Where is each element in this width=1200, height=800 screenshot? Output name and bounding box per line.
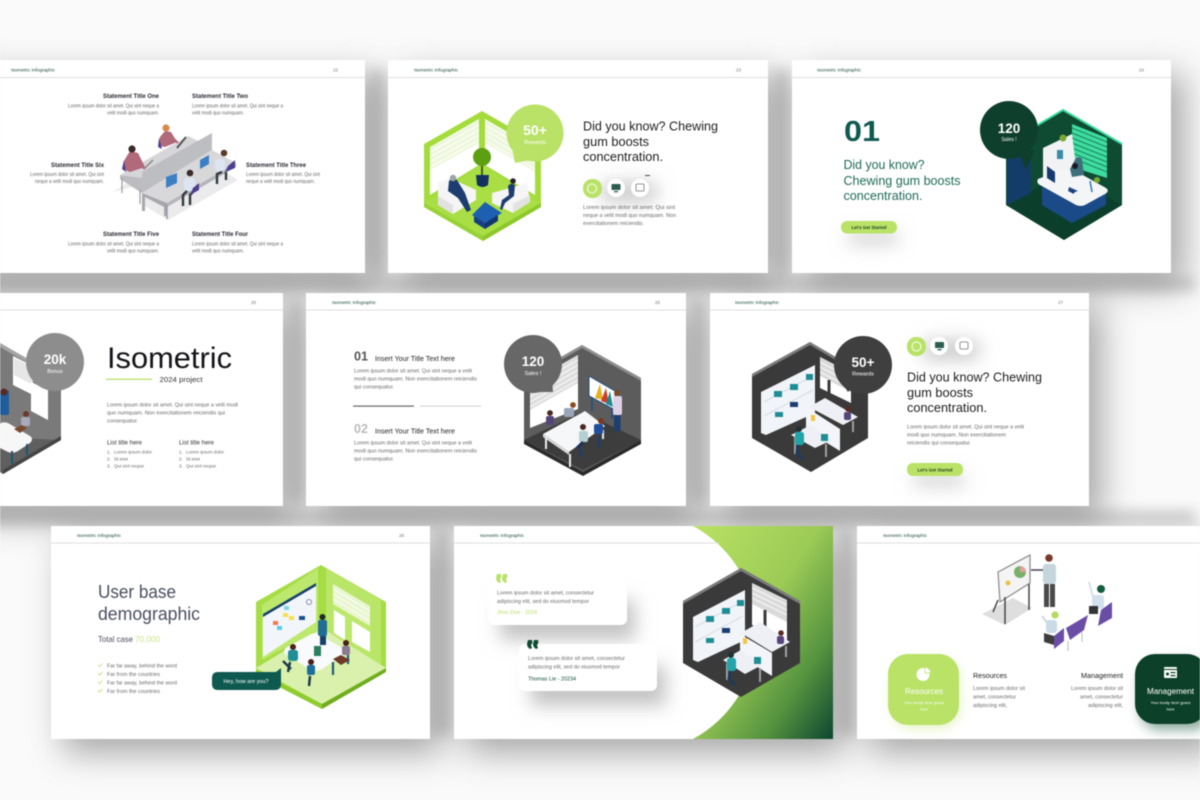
list: first column: 1. [107,450,111,454]
bubble: 50+ rewards dark [834,336,892,394]
text: body copy: neque a velit modi quo numquam. Non [583,213,676,219]
item: 01 title: modi quo numquam. Non exercitationem reiciendis [354,376,478,382]
person: top left worker [122,145,145,172]
panel: user base demographic slide 28 [51,526,430,739]
panel: 01 did you know slide 24: Isometric Infographic [817,68,862,74]
card: testimonial one [488,574,635,640]
text: body copy: quo numquam. Non exercitationem reiciendis qui [107,410,225,416]
illustration: gray presentation room [524,345,641,476]
person: presenter [1031,554,1056,607]
button: let's get started: Let's Get Started [852,225,887,230]
panel: resources and management slide: Isometric Infographic [883,533,928,539]
item: 01 title: Insert Your Title Text here [375,356,455,363]
card: testimonial one: adipiscing elit, sed do eiusmod tempor [497,599,589,605]
text: statement six: Lorem ipsum dolor sit amet. Qui sint [30,172,105,178]
text: resources description: amet, consectetur [973,694,1016,700]
item: 02 title: 02 [354,421,368,436]
person: front worker back [183,170,199,206]
list: first column [107,440,153,468]
illustration: green meeting room [256,565,386,709]
heading: did you know green: Did you know? [844,157,924,172]
text: statement four: Lorem ipsum dolor sit amet. Qui sint neque a [192,242,283,248]
text: statement five: Statement Title Five [103,231,159,238]
list: first column: Lorem ipsum dolor [114,450,153,454]
list: second column: 1. [179,450,183,454]
bubble: 50+ rewards: 50+ [523,122,547,138]
bubble: 20k bonus: 20k [44,352,67,367]
illustration: dark shelf room [752,342,868,472]
panel: did you know dark slide 27: 27 [1058,300,1064,305]
text: management description: Lorem ipsum dolor sit [1071,686,1124,692]
text: resources description [973,673,1026,709]
text: body copy: Lorem ipsum dolor sit amet. Qui sint [583,205,676,211]
icon: dark quote mark [527,640,538,649]
card: management: You body text goes [1150,700,1190,705]
text: statement two: Lorem ipsum dolor sit amet. Qui sint neque a [192,104,283,110]
text: statement two: velit modi quo numquam. [192,110,244,116]
icon: blue monitors [166,155,209,188]
text: statement three: neque a velit modi quo numquam. [246,179,315,185]
stat: total case 70,000 [98,634,160,644]
person: student hand raised [1089,582,1112,626]
heading: user base demographic [98,581,200,624]
text: statement four [192,231,283,254]
card: testimonial two: adipiscing elit, sed do eiusmod tempor [528,664,620,670]
card: testimonial one: Lorem ipsum dolor sit amet, consectetur [497,590,594,596]
list: first column: Sit amet [114,456,129,462]
chart: presentation board [589,376,615,419]
button: let's get started: Let's Get Started [918,468,953,472]
text: body copy [907,424,1025,446]
illustration: dark shelf room on gradient [683,568,800,697]
icon row: home, monitor, folder [583,179,658,201]
text: statement three: Lorem ipsum dolor sit amet. Qui sint [246,172,321,178]
card: testimonial two: Lorem ipsum dolor sit amet, consectetur [528,656,625,662]
card: resources: You body text goes [904,700,944,705]
chart: planning wall board [263,583,316,657]
illustration: presenter with board and students [982,554,1112,651]
stat: total case 70,000: Total case [98,634,133,644]
panel: two titles slide 26: Isometric Infographic [332,300,377,306]
list: second column: 3. [179,464,183,468]
list: checklist: Far far away, behind the word [107,680,177,686]
text: statement three [246,162,321,185]
heading: did you know [907,370,1042,415]
icon: right sofa with woman [492,178,530,213]
heading: user base demographic: User base [98,581,176,602]
text: statement five: Lorem ipsum dolor sit amet. Qui sint neque a [68,242,159,248]
card: testimonial two [519,640,666,706]
heading: did you know [583,118,718,164]
panel: user base demographic slide 28: Isometric Infographic [77,533,122,539]
icon: id card [1164,667,1177,678]
item: 02 title: modi quo numquam. Non exercitationem reiciendis [354,448,478,454]
heading: user base demographic: demographic [98,603,200,624]
text: statement five: velit modi quo numquam. [107,248,159,254]
text: statement three: Statement Title Three [246,162,306,169]
text: body copy: exercitationem reiciendis. [583,221,644,227]
text: statement one [68,93,159,116]
text: body copy: Lorem ipsum dolor sit amet. Qui sint neque a velit [907,424,1025,430]
text: statement five [68,231,159,254]
heading: isometric: Isometric [107,342,232,375]
heading: did you know: Did you know? Chewing [907,370,1042,384]
callout: hey how are you: Hey, how are you? [224,679,268,685]
text: statement one: velit modi quo numquam. [107,110,159,116]
subheading: 2024 project: 2024 project [160,375,203,384]
icon: standing presenter [613,390,622,431]
panel: did you know dark slide 27: Isometric Infographic [735,300,780,306]
heading: did you know: gum boosts [907,385,973,400]
text: statement six: neque a velit modi quo numquam. [35,179,104,185]
icon: pie chart [916,667,931,681]
button: let's get started [907,463,965,485]
list: second column [179,440,225,468]
card: management [1135,654,1200,730]
item: 01 title [354,348,478,390]
text: body copy: consequatur. [107,418,138,424]
background: green gradient curve [693,526,833,739]
text: management description: Management [1081,673,1123,680]
bubble: 120 sales gray [504,335,562,393]
illustration: gray meeting room cropped [0,343,61,474]
list: second column: Lorem ipsum dolor [186,450,225,454]
icon row: home, monitor, folder [907,337,980,359]
bubble: 20k bonus: Bonus [47,369,63,375]
text: statement six: Statement Title Six [51,162,104,169]
panel: testimonials slide [454,526,833,739]
heading: did you know: gum boosts [583,134,649,149]
bubble: 50+ rewards: Rewards [524,140,546,146]
list: second column: 2. [179,456,183,462]
list: first column: Qui sint neque [114,464,145,468]
callout: hey how are you [212,668,281,690]
panel: isometric 2024 project slide 25: 25 [251,300,257,305]
text: management description: adipiscing elit, [1088,703,1123,709]
icon: potted plant [473,148,491,187]
text: statement one: Statement Title One [103,93,159,100]
text: statement four: Statement Title Four [192,231,248,238]
text: statement four: velit modi quo numquam. [192,248,244,254]
bubble: 120 sales gray: 120 [522,354,544,369]
panel: did you know slide 23: Isometric Infographic [414,68,459,74]
list: first column: List title here [107,440,142,446]
icon: meeting people [283,614,350,686]
panel: testimonials slide: Isometric Infographic [480,533,525,539]
panel: two titles slide 26 [306,293,686,506]
card: resources [888,654,960,728]
card: testimonial two: Thomas Lie - 20234 [528,676,576,682]
text: resources description: Lorem ipsum dolor sit [973,686,1026,692]
heading: did you know green: Chewing gum boosts [844,173,961,188]
heading: did you know: concentration. [583,149,663,164]
text: management description [1071,673,1124,709]
bubble: 120 sales: 120 [998,121,1020,136]
person: student seated left [1042,611,1064,649]
panel: resources and management slide [857,526,1200,739]
text: management description: amet, consectetur [1080,694,1123,700]
list: checklist: Far from the countries [107,672,161,678]
text: resources description: adipiscing elit, [973,703,1007,709]
number: 01: 01 [844,116,880,148]
text: body copy: modi quo numquam. Non exercitationem [907,432,1006,438]
item: 02 title: Insert Your Title Text here [375,428,455,436]
panel: did you know slide 23: 23 [736,68,742,72]
text: body copy: Lorem ipsum dolor sit amet. Qui sint neque a velit modi [107,402,238,408]
heading: did you know green [844,157,961,203]
card: resources: here [920,706,929,712]
card: resources: Resources [905,687,943,696]
person: top right worker [158,124,178,149]
item: 02 title: qui consequatur. [354,456,394,462]
list: checklist: Far from the countries [107,689,161,695]
text: statement one: Lorem ipsum dolor sit amet. Qui sint neque a [68,104,159,110]
text: statement two [192,93,283,116]
bubble: 50+ rewards [506,104,564,163]
bubble: 50+ rewards dark: Rewards [852,372,874,378]
icon: left sofa with man [438,175,476,214]
panel: 01 did you know slide 24: 24 [1139,68,1145,72]
item: 01 title: 01 [354,348,368,364]
bubble: 120 sales gray: Sales ! [525,371,542,377]
heading: did you know: Did you know? Chewing [583,118,718,134]
list: second column: List title here [179,440,214,446]
person: right side worker back [215,150,235,184]
item: 02 title [354,421,478,462]
icon: seated meeting people [546,402,604,457]
text: statement two: Statement Title Two [192,93,248,100]
text: body copy: reiciendis qui consequatur. [907,440,971,446]
panel: statement titles slide 22: Isometric Infographic [11,68,56,74]
panel: did you know slide 23 [388,60,768,273]
list: first column: 2. [107,456,111,462]
card: management: Management [1147,687,1195,696]
panel: user base demographic slide 28: 28 [399,533,405,538]
item: 01 title: Lorem ipsum dolor sit amet. Qui sint neque a velit [354,368,473,374]
item: 02 title: Lorem ipsum dolor sit amet. Qui sint neque a velit [354,440,473,446]
text: resources description: Resources [973,673,1007,680]
stat: total case 70,000: 70,000 [135,634,160,644]
list: second column: Qui sint neque [186,464,217,468]
item: 01 title: qui consequatur. [354,384,394,390]
list: checklist: Far far away, behind the word [107,664,177,670]
text: body copy [583,205,676,227]
button: let's get started [841,221,899,243]
text: body copy [107,402,238,424]
panel: 01 did you know slide 24 [792,60,1171,273]
panel: statement titles slide 22: 22 [333,68,339,72]
panel: isometric 2024 project slide 25 [0,293,283,506]
bubble: 20k bonus [26,333,84,391]
panel: two titles slide 26: 26 [655,300,661,305]
list: checklist [98,664,177,695]
card: testimonial one: Jhon Doe - 2024 [497,610,537,616]
bubble: 120 sales: Sales ! [1001,137,1017,143]
panel: statement titles slide 22 [0,60,365,273]
card: management: here [1166,706,1175,712]
heading: did you know: concentration. [907,400,987,415]
bubble: 50+ rewards dark: 50+ [852,355,875,370]
list: second column: Sit amet [186,456,201,462]
heading: did you know green: concentration. [844,188,922,203]
icon: blue table [472,202,502,229]
panel: did you know dark slide 27 [710,293,1089,506]
bubble: 120 sales [980,101,1038,170]
list: first column: 3. [107,464,111,468]
text: statement six [30,162,105,185]
icon: green quote mark [496,574,507,583]
illustration: dark green reception room [1006,110,1122,240]
illustration: office desks with four workers [113,124,238,220]
illustration: green lounge room [424,111,541,241]
